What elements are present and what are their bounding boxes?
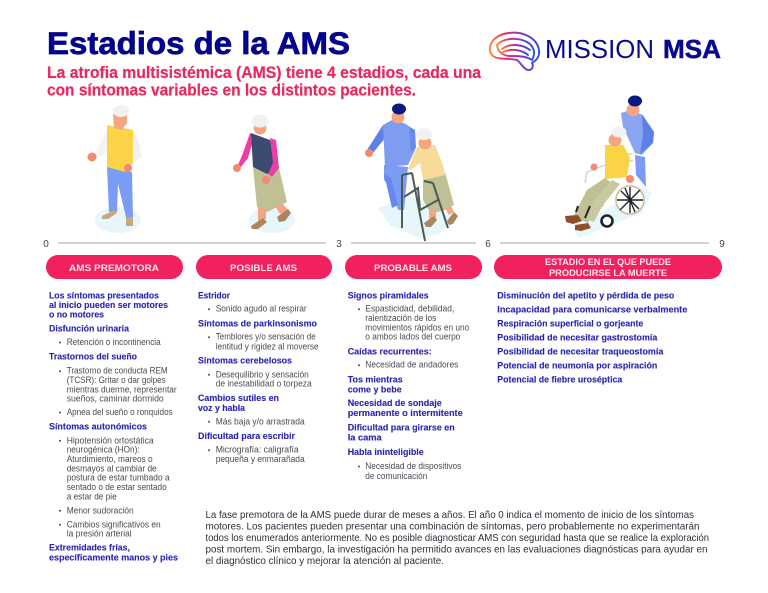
column: probable AMS symptoms: o ambos lados del cuerpo	[365, 332, 460, 342]
column: posible AMS symptoms: Síntomas cerebelosos	[198, 356, 292, 367]
column: AMS premotora symptoms: desmayos al cambiar de	[67, 463, 157, 473]
stage number 6: 6	[485, 239, 491, 250]
column: probable AMS symptoms: movimientos rápidos en uno	[365, 322, 469, 332]
column: AMS premotora symptoms: sueños, caminar dormido	[67, 394, 164, 404]
column: AMS premotora symptoms: Apnea del sueño o ronquidos	[67, 407, 173, 417]
column: AMS premotora symptoms: específicamente manos y pies	[49, 553, 178, 564]
stage pill: probable AMS: PROBABLE AMS	[374, 263, 452, 273]
column: probable AMS symptoms: la cama	[348, 433, 382, 444]
column: posible AMS symptoms: Síntomas de parkinsonismo	[198, 318, 317, 329]
column: AMS premotora symptoms: neurogénica (HOn):	[67, 445, 140, 455]
stage pill: posible AMS	[196, 255, 332, 279]
stage pill: AMS premotora: AMS PREMOTORA	[69, 263, 159, 273]
stage pill: estadio en el que puede producirse la muerte: ESTADIO EN EL QUE PUEDE	[545, 257, 671, 267]
stage pill: probable AMS	[345, 255, 482, 279]
column: AMS premotora symptoms: mientras duerme, representar	[67, 384, 177, 394]
column: probable AMS symptoms: ralentización de los	[365, 313, 437, 323]
column: probable AMS symptoms: come y bebe	[348, 384, 402, 395]
column: probable AMS symptoms: Signos piramidales	[348, 290, 429, 301]
figure: patient in wheelchair with carer, final stage	[565, 96, 654, 238]
column: AMS premotora symptoms: Cambios significativos en	[67, 519, 161, 529]
stage number 0: 0	[43, 239, 49, 250]
column: posible AMS symptoms: Micrografía: caligrafía	[216, 445, 299, 455]
footnote text: post mortem. Sin embargo, la investigación ha permitido avances en las evaluaciones diagnósticas para ayudar en	[206, 545, 708, 556]
footnote text: todos los enumerados anteriormente. No es posible diagnosticar AMS con seguridad hasta que se realice la exploración	[206, 533, 709, 544]
column: posible AMS symptoms: Sonido agudo al respirar	[216, 304, 307, 314]
stage pill: estadio en el que puede producirse la muerte: PRODUCIRSE LA MUERTE	[549, 268, 667, 278]
logo: Mission MSA	[490, 33, 721, 70]
column: final stage symptoms: Respiración superficial o gorjeante	[497, 318, 643, 329]
column: final stage symptoms: Disminución del apetito y pérdida de peso	[497, 290, 674, 301]
column: AMS premotora symptoms: Trastornos del sueño	[49, 352, 137, 363]
column: AMS premotora symptoms: postura de estar tumbado a	[67, 473, 170, 483]
footnote text	[206, 510, 709, 567]
column: AMS premotora symptoms: Menor sudoración	[67, 505, 134, 515]
column: probable AMS symptoms: permanente o intermitente	[348, 408, 463, 419]
column: posible AMS symptoms: Más baja y/o arrastrada	[216, 416, 305, 426]
column: probable AMS symptoms	[348, 290, 469, 481]
column: posible AMS symptoms: Dificultad para escribir	[198, 431, 295, 442]
subtitle: con síntomas variables en los distintos pacientes.	[47, 82, 416, 100]
column: probable AMS symptoms: Dificultad para girarse en	[348, 423, 455, 434]
figure: standing man, premotor stage	[88, 105, 141, 233]
column: posible AMS symptoms: Cambios sutiles en	[198, 393, 279, 404]
column: AMS premotora symptoms: Hipotensión ortostática	[67, 435, 154, 445]
column: probable AMS symptoms: Espasticidad, debilidad,	[365, 304, 454, 314]
column: AMS premotora symptoms: Los síntomas presentados	[49, 290, 159, 301]
column: AMS premotora symptoms: o no motores	[49, 310, 104, 321]
column: posible AMS symptoms: pequeña y enmarañada	[216, 454, 305, 464]
column: probable AMS symptoms: Necesidad de sondaje	[348, 398, 442, 409]
column: posible AMS symptoms: Estridor	[198, 290, 230, 301]
footnote text: La fase premotora de la AMS puede durar de meses a años. El año 0 indica el momento de inicio de los síntomas	[206, 510, 694, 521]
column: AMS premotora symptoms: Disfunción urinaria	[49, 323, 130, 334]
stage number 9: 9	[719, 239, 725, 250]
column: AMS premotora symptoms: Síntomas autonómicos	[49, 421, 147, 432]
column: posible AMS symptoms: voz y habla	[198, 403, 246, 414]
column: probable AMS symptoms: Caídas recurrentes:	[348, 346, 432, 357]
column: AMS premotora symptoms: a estar de pie	[67, 491, 117, 501]
logo text: MISSION	[545, 34, 654, 64]
column: posible AMS symptoms: de inestabilidad o torpeza	[216, 379, 312, 389]
stage pill: AMS premotora	[46, 255, 183, 279]
subtitle: La atrofia multisistémica (AMS) tiene 4 estadios, cada una	[47, 64, 482, 82]
column: probable AMS symptoms: de comunicación	[365, 471, 427, 481]
column: AMS premotora symptoms	[49, 290, 178, 564]
column: probable AMS symptoms: Habla ininteligible	[348, 447, 424, 458]
column: posible AMS symptoms: lentitud y rigidez al moverse	[216, 341, 319, 351]
column: final stage symptoms: Posibilidad de necesitar gastrostomía	[497, 332, 658, 343]
column: AMS premotora symptoms: la presión arterial	[67, 529, 132, 539]
column: posible AMS symptoms: Temblores y/o sensación de	[216, 332, 316, 342]
column: AMS premotora symptoms: al inicio pueden ser motores	[49, 300, 168, 311]
timeline	[43, 239, 725, 250]
column: final stage symptoms: Potencial de fiebre uroséptica	[497, 374, 623, 385]
column: AMS premotora symptoms: Aturdimiento, mareos o	[67, 454, 153, 464]
column: probable AMS symptoms: Necesidad de dispositivos	[365, 461, 462, 471]
column: posible AMS symptoms	[198, 290, 319, 464]
title: Estadios de la AMS	[47, 25, 350, 61]
stage number 3: 3	[336, 239, 342, 250]
column: final stage symptoms: Incapacidad para comunicarse verbalmente	[497, 304, 687, 315]
column: probable AMS symptoms: Necesidad de andadores	[365, 360, 459, 370]
column: final stage symptoms: Potencial de neumonía por aspiración	[497, 360, 657, 371]
stage pill: posible AMS: POSIBLE AMS	[230, 263, 297, 273]
column: final stage symptoms: Posibilidad de necesitar traqueostomía	[497, 346, 664, 357]
column: AMS premotora symptoms: (TCSR): Gritar o dar golpes	[67, 375, 166, 385]
icon: brain	[490, 33, 539, 70]
column: probable AMS symptoms: Tos mientras	[348, 374, 403, 385]
column: AMS premotora symptoms: sentado o de estar sentado	[67, 482, 167, 492]
logo: Mission MSA: MSA	[663, 34, 721, 64]
subtitle	[47, 64, 482, 100]
figure: patient with walker and carer, probable stage	[365, 104, 458, 241]
column: AMS premotora symptoms: Trastorno de conducta REM	[67, 366, 168, 376]
column: final stage symptoms	[497, 290, 687, 385]
stage pill: estadio en el que puede producirse la muerte	[494, 255, 722, 279]
column: AMS premotora symptoms: Extremidades frías,	[49, 543, 130, 554]
footnote text: el diagnóstico clínico y mejorar la atención al paciente.	[206, 556, 444, 567]
figure: woman walking, possible stage	[233, 114, 295, 233]
footnote text: motores. Los pacientes pueden presentar una combinación de síntomas, pero probablemente no experimentarán	[206, 522, 700, 532]
column: AMS premotora symptoms: Retención o incontinencia	[67, 337, 161, 347]
column: posible AMS symptoms: Desequilibrio y sensación	[216, 369, 309, 379]
